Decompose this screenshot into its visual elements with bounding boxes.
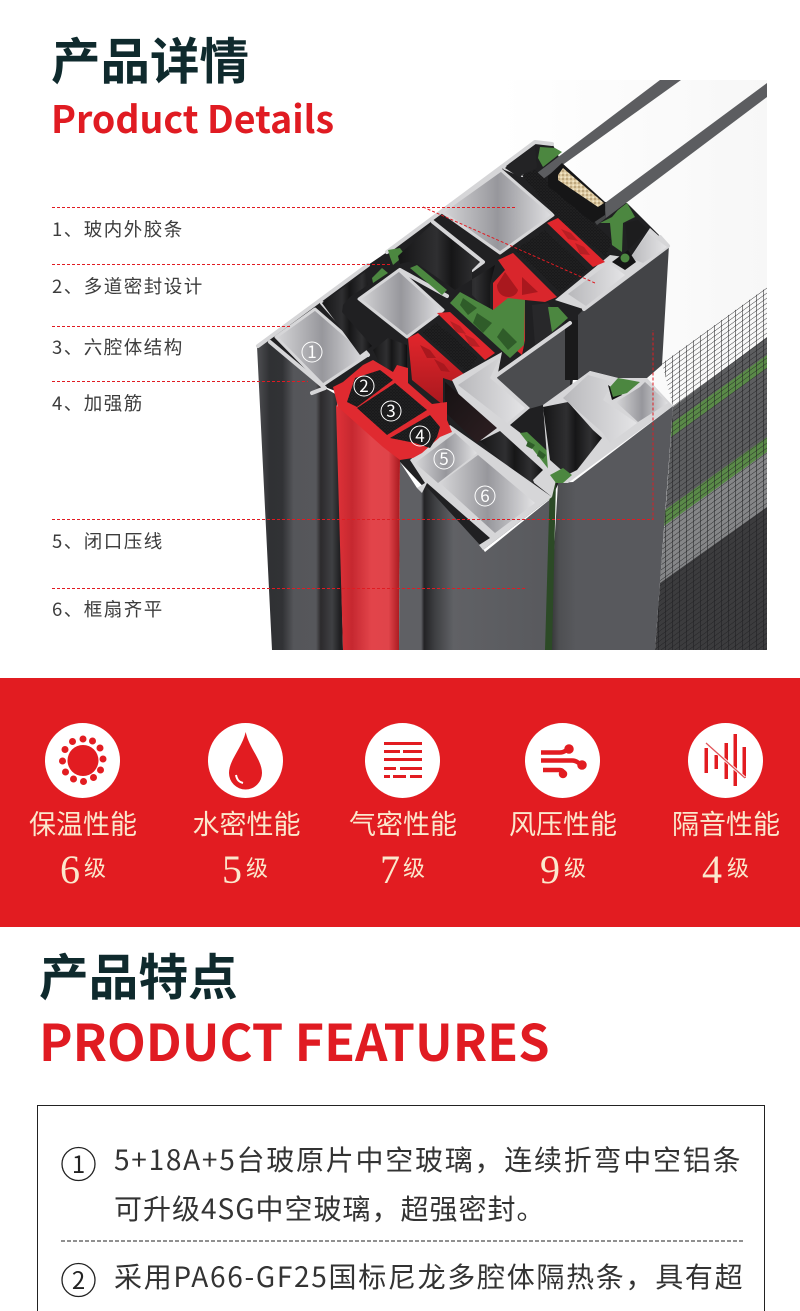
metric: 隔音性能: 隔音性能 <box>672 803 780 842</box>
red thermal strip face <box>336 405 400 650</box>
lower grey chamber frame <box>452 352 560 497</box>
metric: 保温性能: 6 <box>60 847 80 892</box>
glass spacer <box>548 163 605 223</box>
upper frame face <box>578 245 669 380</box>
feature 1: 1 <box>72 1145 85 1180</box>
green corner seals <box>372 248 447 295</box>
icon: wind <box>541 746 584 776</box>
heading: 产品详情: Product Details <box>51 89 334 144</box>
green outer gasket <box>600 203 635 252</box>
cavity 2 <box>359 270 443 337</box>
feature 1: 5+18A+5台玻原片中空玻璃，连续折弯中空铝条 <box>114 1139 742 1179</box>
top cavity <box>442 170 553 253</box>
feature 2: 2 <box>72 1261 85 1296</box>
callout labels <box>52 216 204 622</box>
marker digits: 1 <box>307 338 317 363</box>
metric: 气密性能: 级 <box>403 851 425 883</box>
cavity 1 <box>276 309 368 385</box>
foam under glass <box>522 170 612 257</box>
callout labels: 6、框扇齐平 <box>52 596 164 622</box>
metric: 保温性能: 级 <box>84 851 106 883</box>
metric: 风压性能: 9 <box>540 847 560 892</box>
dark chamber lower <box>445 382 497 443</box>
insect mesh <box>655 287 767 650</box>
rims <box>258 142 668 393</box>
icon: air tightness lines <box>384 742 422 778</box>
marker digits: 4 <box>415 422 425 447</box>
heading: 产品特点 <box>39 938 550 1076</box>
metric: 风压性能: 风压性能 <box>509 803 617 842</box>
desiccant <box>558 168 604 207</box>
top green gasket <box>538 147 562 167</box>
red thermal bar large <box>493 253 557 355</box>
lower right face <box>548 406 673 650</box>
cavity rim <box>410 425 552 550</box>
heading: 产品特点: PRODUCT FEATURES <box>39 1003 550 1076</box>
metric: 风压性能 <box>509 723 617 892</box>
upper-left dark chamber <box>322 272 372 355</box>
icon: sun <box>59 736 106 785</box>
icon: muted sound bars <box>704 734 746 786</box>
callout labels: 5、闭口压线 <box>52 528 164 554</box>
metric: 隔音性能: 4 <box>702 847 722 892</box>
left frame face <box>257 340 343 650</box>
feature 2: 采用PA66-GF25国标尼龙多腔体隔热条，具有超 <box>114 1256 744 1296</box>
top dark chamber <box>505 145 537 178</box>
heading: 产品详情 <box>51 23 334 144</box>
metric: 水密性能: 级 <box>246 851 268 883</box>
heading: 产品特点: 产品特点 <box>39 938 238 1010</box>
cavity 6 <box>440 455 535 533</box>
foam 2 <box>347 370 393 407</box>
metric: 气密性能 <box>349 723 457 892</box>
metric: 气密性能: 7 <box>380 847 400 892</box>
red seal assembly <box>333 360 452 460</box>
marker digits: 2 <box>359 372 369 397</box>
green strip lower <box>520 432 560 471</box>
red thermal bar centre <box>437 312 495 360</box>
feature 1 <box>62 1139 742 1228</box>
heading: 产品详情: 产品详情 <box>51 23 249 94</box>
metric: 隔音性能: 级 <box>727 851 749 883</box>
callout leader lines <box>52 207 653 588</box>
section backing <box>257 141 669 550</box>
metric: 风压性能: 级 <box>564 851 586 883</box>
marker digits: 6 <box>480 482 490 507</box>
metric: 水密性能: 5 <box>222 847 242 892</box>
foam 4 <box>390 415 440 448</box>
green T gasket <box>450 292 525 358</box>
large dark chamber <box>398 224 495 313</box>
product cross-section diagram <box>257 80 767 650</box>
metric: 水密性能 <box>192 723 300 892</box>
marker digits: 5 <box>439 445 449 470</box>
metric: 保温性能 <box>29 723 137 892</box>
red thermal bar vertical <box>408 333 465 405</box>
red thermal bar top <box>547 218 605 267</box>
rear chamber <box>480 431 543 490</box>
foam centre <box>422 323 478 372</box>
cavity 5 <box>415 433 477 483</box>
marker digits: 3 <box>386 397 396 422</box>
callout labels: 2、多道密封设计 <box>52 273 204 299</box>
feature 1: 可升级4SG中空玻璃，超强密封。 <box>114 1188 546 1228</box>
metric: 气密性能: 气密性能 <box>349 803 457 842</box>
foam middle <box>515 230 588 292</box>
metric: 保温性能: 保温性能 <box>29 803 137 842</box>
sash face <box>490 323 570 410</box>
dark column <box>373 338 407 395</box>
feature list panel <box>38 1106 764 1311</box>
callout labels: 4、加强筋 <box>52 390 144 416</box>
callout labels: 1、玻内外胶条 <box>52 216 184 242</box>
metric: 水密性能: 水密性能 <box>192 803 300 842</box>
numbered markers <box>302 342 495 506</box>
glass pane bars <box>537 80 767 225</box>
metric: 隔音性能 <box>672 723 780 892</box>
foam 3 <box>357 383 427 435</box>
lower right profile <box>543 371 673 483</box>
callout labels: 3、六腔体结构 <box>52 334 184 360</box>
icon: water drop <box>229 732 262 790</box>
red performance band <box>0 678 800 927</box>
middle frame face <box>399 462 553 650</box>
grey chamber <box>458 357 525 423</box>
green seal line <box>545 480 556 650</box>
marker digits <box>307 338 490 507</box>
top right chambers <box>555 220 669 309</box>
photo backdrop <box>500 80 767 650</box>
dark post and side seal <box>532 303 568 345</box>
